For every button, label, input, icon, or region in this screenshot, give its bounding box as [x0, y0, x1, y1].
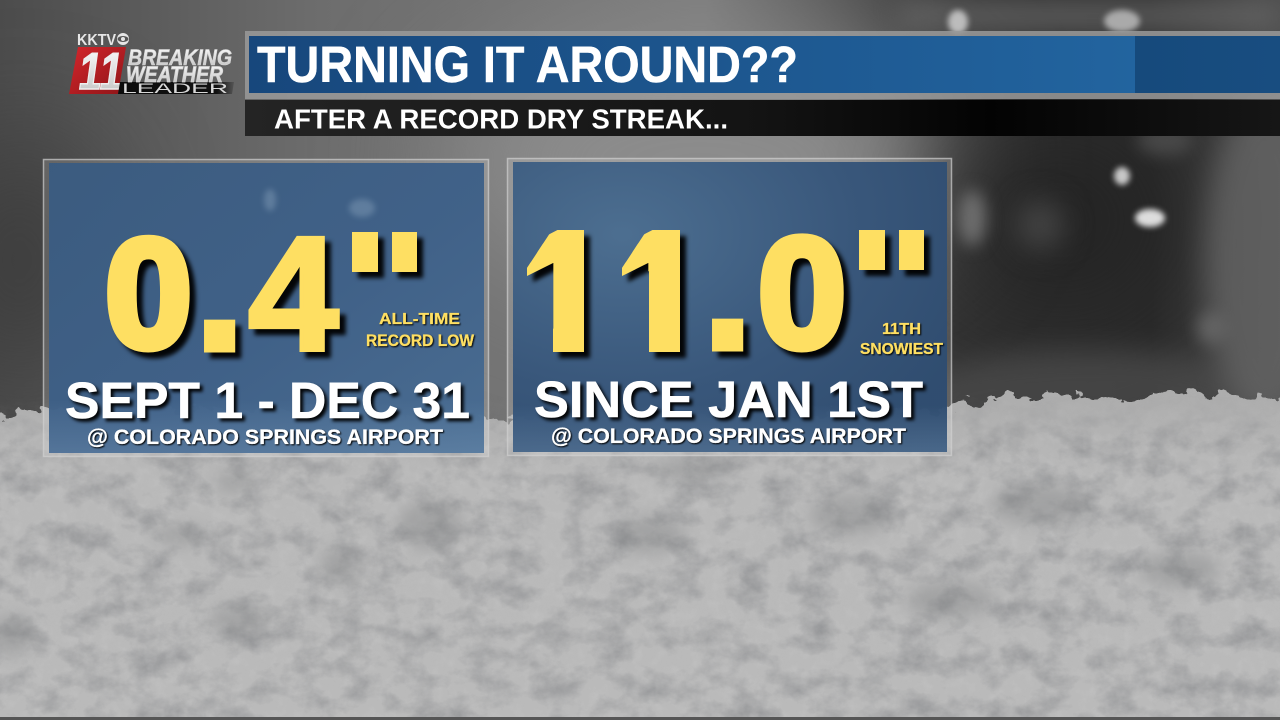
title bar: [245, 31, 1280, 99]
logo: CBS eye: [117, 33, 129, 45]
panel: year-to-date snowfall total: [508, 158, 952, 456]
panel: fall snowfall total: [44, 159, 488, 456]
note: all-time record low: [366, 311, 475, 350]
note: 11th snowiest: [860, 321, 944, 358]
location: @ COLORADO SPRINGS AIRPORT: [551, 424, 906, 448]
big number: 0.4 inches: ": [340, 202, 430, 376]
note: 11th snowiest: SNOWIEST: [860, 341, 944, 358]
date range: SINCE JAN 1ST: [534, 371, 923, 428]
heading: TURNING IT AROUND??: [257, 36, 798, 93]
logo: KKTV wordmark: KKTV: [77, 32, 116, 49]
big number: 11.0 inches: 1: [510, 197, 628, 387]
logo: red block with 11: 11: [75, 43, 127, 101]
subtitle bar: [245, 100, 1280, 136]
big number: 0.4 inches: [107, 232, 426, 362]
logo: black strip: [118, 82, 234, 94]
big number: 0.4 inches: 4: [248, 202, 339, 385]
note: all-time record low: RECORD LOW: [366, 331, 475, 350]
note: all-time record low: ALL-TIME: [379, 311, 460, 328]
big number: 11.0 inches: ": [847, 200, 937, 374]
big number: 11.0 inches: 0: [758, 206, 846, 381]
big number: 0.4 inches: 0: [105, 208, 192, 381]
logo: WEATHER: WEATHER: [126, 62, 223, 87]
location: @ COLORADO SPRINGS AIRPORT: [87, 425, 443, 449]
broadcaster logo: KKTV 11 Breaking Weather Leader: [69, 32, 234, 101]
big number: 0.4 inches: .: [190, 159, 249, 398]
big number: 11.0 inches: [527, 230, 933, 362]
subtitle: AFTER A RECORD DRY STREAK...: [274, 104, 728, 134]
big number: 11.0 inches: .: [698, 158, 757, 397]
background photo: snow bank: [0, 389, 1280, 720]
logo: BREAKING: BREAKING: [128, 45, 232, 70]
note: 11th snowiest: 11TH: [882, 321, 921, 338]
logo: LEADER wordmark: LEADER: [122, 80, 228, 96]
big number: 11.0 inches: 1: [605, 197, 723, 387]
date range: SEPT 1 - DEC 31: [65, 372, 470, 429]
